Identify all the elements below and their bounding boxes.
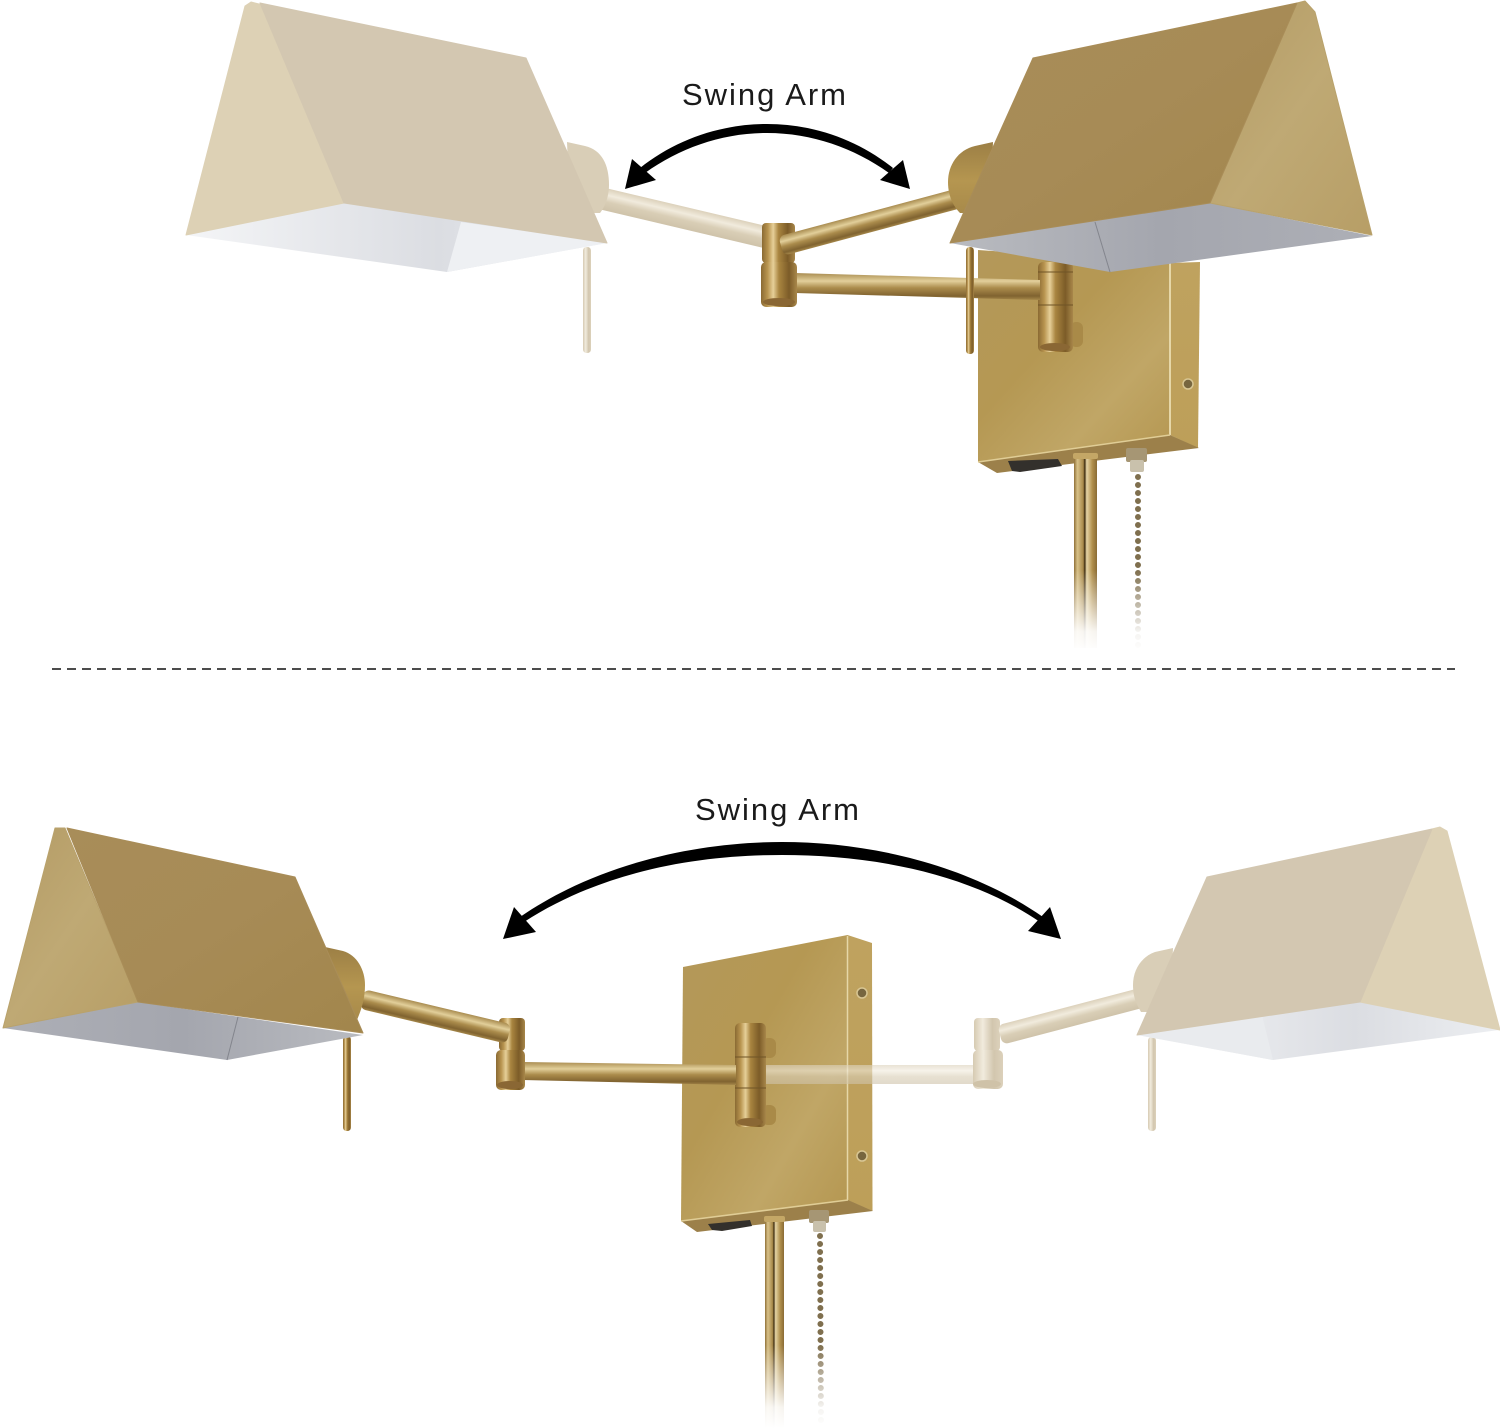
pivot cylinder, top: [1038, 262, 1083, 352]
upper swing arm, top: [778, 188, 963, 256]
pull switch knob, top: [1126, 448, 1147, 472]
upper swing arm, bottom: [360, 989, 511, 1044]
screw top: [857, 988, 867, 998]
elbow joint, top: [761, 223, 797, 307]
screw bottom: [857, 1151, 867, 1161]
gold lamp shade, bottom: [3, 828, 363, 1060]
label: swing arm, bottom: Swing Arm: [695, 792, 859, 827]
lower swing arm, bottom: [523, 1062, 736, 1085]
ghost pull rod, bottom: [1148, 1037, 1156, 1131]
arrow: double-headed swing, top: [625, 124, 910, 189]
switch: [1008, 459, 1062, 472]
cord cover, top: [1073, 453, 1098, 648]
label: swing arm, top: Swing Arm: [682, 77, 846, 112]
pivot cylinder, bottom: [735, 1023, 776, 1127]
cord fade, bottom: [750, 1345, 850, 1428]
lower swing arm, top: [795, 273, 1040, 300]
cord fade, top: [1060, 570, 1160, 652]
ghost pull rod, top: [583, 247, 591, 353]
screw: [1183, 379, 1193, 389]
wall backplate, bottom: [681, 935, 873, 1232]
ghost horizontal arm across plate: [766, 1065, 974, 1084]
gold pull rod, bottom: [343, 1036, 351, 1131]
lamp hub, top: [948, 142, 993, 213]
ghost lamp shade, bottom: [1137, 827, 1500, 1060]
ghost lamp arm, top: [567, 142, 767, 248]
ghost lamp shade, top: [186, 2, 607, 272]
pull switch knob, bottom: [809, 1210, 829, 1232]
arrow: double-headed swing, bottom: [503, 842, 1061, 939]
panel: bottom lamp swing illustration: [3, 792, 1500, 1428]
elbow joint, bottom: [496, 1018, 525, 1090]
ghost hub, bottom: [1133, 948, 1173, 1012]
bead chain, top: [1135, 477, 1141, 648]
bead chain, bottom: [820, 1236, 821, 1426]
divider: dashed line: [52, 668, 1455, 670]
gold lamp shade, top: [950, 1, 1372, 272]
gold pull rod, top: [966, 247, 974, 354]
switch: [708, 1220, 752, 1231]
hub, bottom: [325, 947, 365, 1020]
cord cover, bottom: [764, 1216, 785, 1428]
ghost elbow joint, bottom: [973, 1018, 1003, 1089]
ghost upper arm, bottom: [997, 987, 1150, 1045]
wall backplate, top: [978, 250, 1200, 473]
panel: top lamp swing illustration: [186, 1, 1372, 652]
